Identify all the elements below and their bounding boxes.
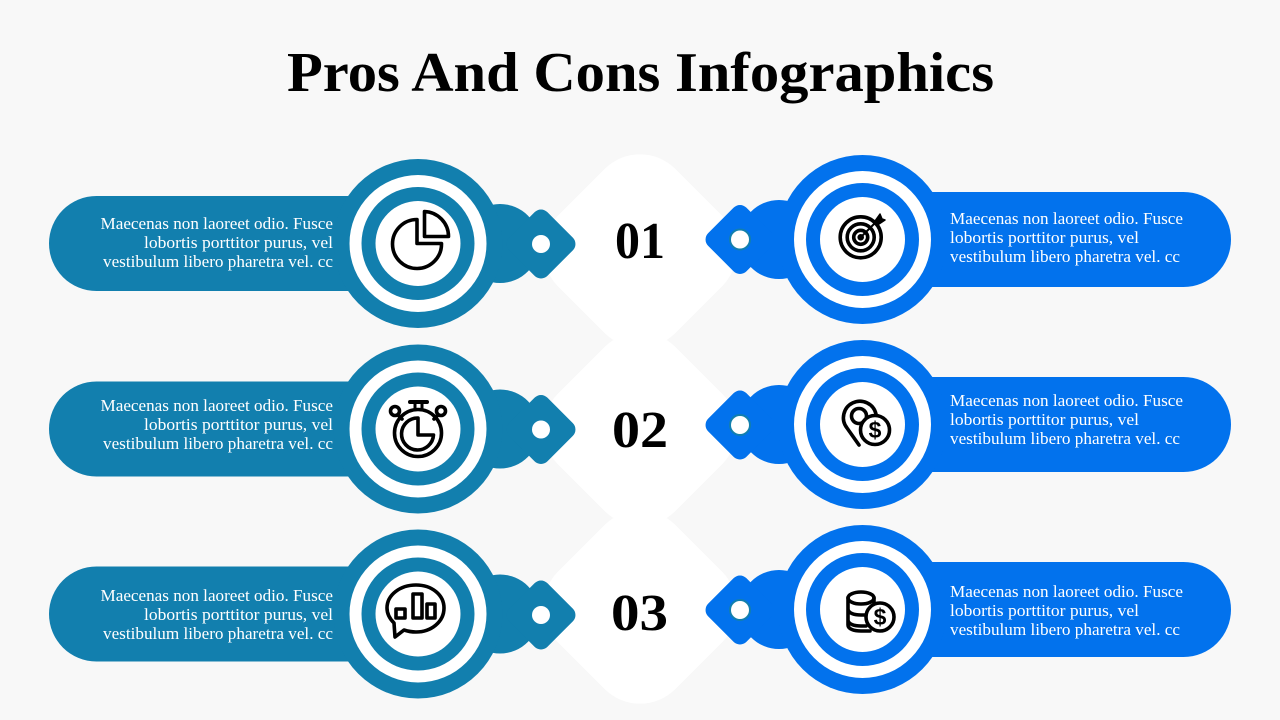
connector and tag 1 (460, 204, 579, 283)
number 03: 03 (611, 585, 668, 642)
icon: pie chart (393, 212, 448, 268)
text: right block 2: Maecenas non laoreet odio. Fusce (950, 391, 1183, 410)
text: left block 2 (100, 396, 333, 453)
right bar 1 (862, 192, 1231, 287)
panel: left row 3 (49, 530, 579, 698)
right bar 3 (862, 562, 1231, 657)
text: right block 3: Maecenas non laoreet odio. Fusce (950, 582, 1183, 601)
text: left block 3: Maecenas non laoreet odio. Fusce (100, 586, 333, 605)
number 01: 01 (615, 213, 665, 270)
panel: left row 2 (49, 344, 579, 514)
ring badge 1 (334, 159, 502, 328)
panel: left row 1 (49, 159, 579, 328)
icon: coin stack with dollar: $ (874, 604, 887, 630)
connector and tag 3 (702, 570, 818, 649)
connector and tag 2 (702, 385, 818, 464)
text: right block 1 (950, 209, 1183, 266)
ring badge 3 (334, 530, 502, 698)
icon: location pin with dollar coin (843, 401, 890, 445)
text: right block 3: lobortis porttitor purus, vel (950, 601, 1139, 620)
text: left block 1 (100, 214, 333, 271)
text: left block 1: Maecenas non laoreet odio. Fusce (100, 214, 333, 233)
left bar 3 (49, 566, 418, 662)
panel: right row 2 (702, 340, 1231, 509)
text: left block 3: vestibulum libero pharetra vel. cc (103, 624, 333, 643)
ring badge 3 (778, 525, 947, 694)
panel: right row 1 (702, 155, 1231, 324)
text: right block 1: lobortis porttitor purus, vel (950, 228, 1139, 247)
text: right block 1: Maecenas non laoreet odio. Fusce (950, 209, 1183, 228)
center white diamonds (523, 134, 757, 720)
right bar 2 (862, 377, 1231, 472)
connector and tag 3 (460, 574, 579, 654)
text: left block 3: lobortis porttitor purus, vel (144, 605, 333, 624)
text: right block 3 (950, 582, 1183, 639)
icon: chat bubble with bars (387, 585, 444, 637)
text: left block 1: lobortis porttitor purus, vel (144, 233, 333, 252)
ring badge 2 (778, 340, 947, 509)
left bar 2 (49, 382, 418, 476)
ring badge 1 (778, 155, 947, 324)
text: left block 2: lobortis porttitor purus, vel (144, 415, 333, 434)
ring badge 2 (334, 344, 502, 514)
panel: right row 3 (702, 525, 1231, 694)
text: left block 3 (100, 586, 333, 643)
icon: location pin with dollar coin: $ (869, 417, 882, 443)
text: left block 1: vestibulum libero pharetra vel. cc (103, 252, 333, 271)
connector and tag 1 (702, 200, 818, 279)
title: Pros And Cons Infographics (287, 42, 994, 104)
number 02: 02 (612, 402, 668, 459)
icon: target with arrow (840, 214, 885, 258)
icon: stopwatch (390, 402, 446, 456)
icon: coin stack with dollar (848, 592, 894, 631)
text: right block 2: vestibulum libero pharetra vel. cc (950, 429, 1180, 448)
text: left block 2: Maecenas non laoreet odio. Fusce (100, 396, 333, 415)
text: right block 1: vestibulum libero pharetra vel. cc (950, 247, 1180, 266)
text: right block 2: lobortis porttitor purus, vel (950, 410, 1139, 429)
text: right block 3: vestibulum libero pharetra vel. cc (950, 620, 1180, 639)
left bar 1 (49, 196, 418, 291)
text: left block 2: vestibulum libero pharetra vel. cc (103, 434, 333, 453)
text: right block 2 (950, 391, 1183, 448)
connector and tag 2 (460, 390, 579, 468)
